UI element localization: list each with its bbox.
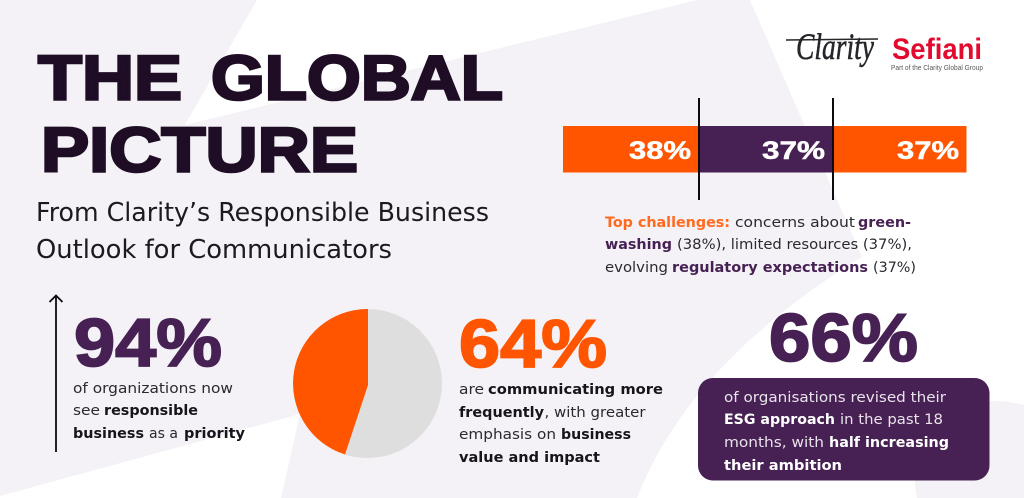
text: 94% description: see	[73, 402, 100, 419]
text block: top challenges: green-	[858, 214, 911, 231]
title: GLOBAL	[211, 44, 503, 114]
text: 64% description: emphasis on	[459, 426, 556, 443]
divider line two	[832, 98, 834, 200]
text block: top challenges: (37%)	[873, 259, 916, 276]
bar chart: top challenges	[563, 98, 966, 200]
number: 64%: 64%	[459, 306, 607, 382]
text: 64% description	[459, 381, 663, 466]
text: 64% description: value and impact	[459, 449, 600, 466]
title: THE	[38, 44, 182, 114]
logo: Sefiani: Sefiani	[892, 33, 982, 66]
text: 64% description: business	[561, 426, 631, 443]
bar segment: regulatory expectations	[833, 126, 966, 172]
stat: 94%	[73, 305, 245, 442]
text block: top challenges: washing	[605, 236, 672, 253]
text: 64% description: are	[459, 381, 484, 398]
logo: Clarity: Clarity	[796, 27, 874, 68]
title	[38, 44, 503, 186]
bar segment: limited resources	[699, 126, 833, 172]
callout: 66% description panel	[698, 378, 990, 480]
pie slice: highlighted share	[293, 309, 368, 454]
subtitle: From Clarity’s Responsible Business	[36, 198, 489, 228]
callout: 66% description panel: half increasing	[829, 434, 949, 451]
title: PICTURE	[41, 116, 358, 186]
subtitle	[36, 198, 489, 265]
text: 64% description: frequently	[459, 404, 544, 421]
logo: Sefiani: Part of the Clarity Global Group	[891, 65, 983, 72]
callout: 66% description panel: of organisations revised their	[724, 389, 946, 406]
text: 64% description: communicating more	[488, 381, 663, 398]
text block: top challenges: Top challenges:	[605, 214, 730, 231]
text block: top challenges: (38%), limited resources (37%),	[677, 236, 912, 253]
subtitle: Outlook for Communicators	[36, 235, 392, 265]
stat: 64%	[459, 306, 663, 466]
text block: top challenges	[605, 214, 916, 276]
text: 94% description: business	[73, 425, 144, 442]
value: 37%: 37%	[897, 137, 959, 165]
bar segment: greenwashing	[563, 126, 699, 172]
text block: top challenges: evolving	[605, 259, 668, 276]
callout: 66% description panel: in the past 18	[840, 411, 943, 428]
text block: top challenges: concerns about	[735, 214, 855, 231]
value: 37%: 37%	[762, 137, 825, 165]
text: 94% description: as a	[149, 425, 178, 442]
pie slice: remainder	[293, 309, 442, 458]
text: 94% description: priority	[184, 425, 245, 442]
stat: 66%: 66%	[769, 300, 918, 376]
text: 94% description: of organizations now	[73, 380, 233, 397]
text: 64% description: , with greater	[544, 404, 646, 421]
pie chart	[293, 309, 442, 458]
text: 94% description: responsible	[104, 402, 198, 419]
icon: up arrow	[50, 296, 62, 452]
callout: 66% description panel: months, with	[724, 434, 824, 451]
divider line one	[698, 98, 700, 200]
text: 94% description	[73, 380, 245, 442]
text block: top challenges: regulatory expectations	[672, 259, 868, 276]
number: 94%: 94%	[74, 305, 222, 381]
callout: 66% description panel: their ambition	[724, 457, 842, 474]
value: 38%: 38%	[629, 137, 691, 165]
callout: 66% description panel: ESG approach	[724, 411, 835, 428]
